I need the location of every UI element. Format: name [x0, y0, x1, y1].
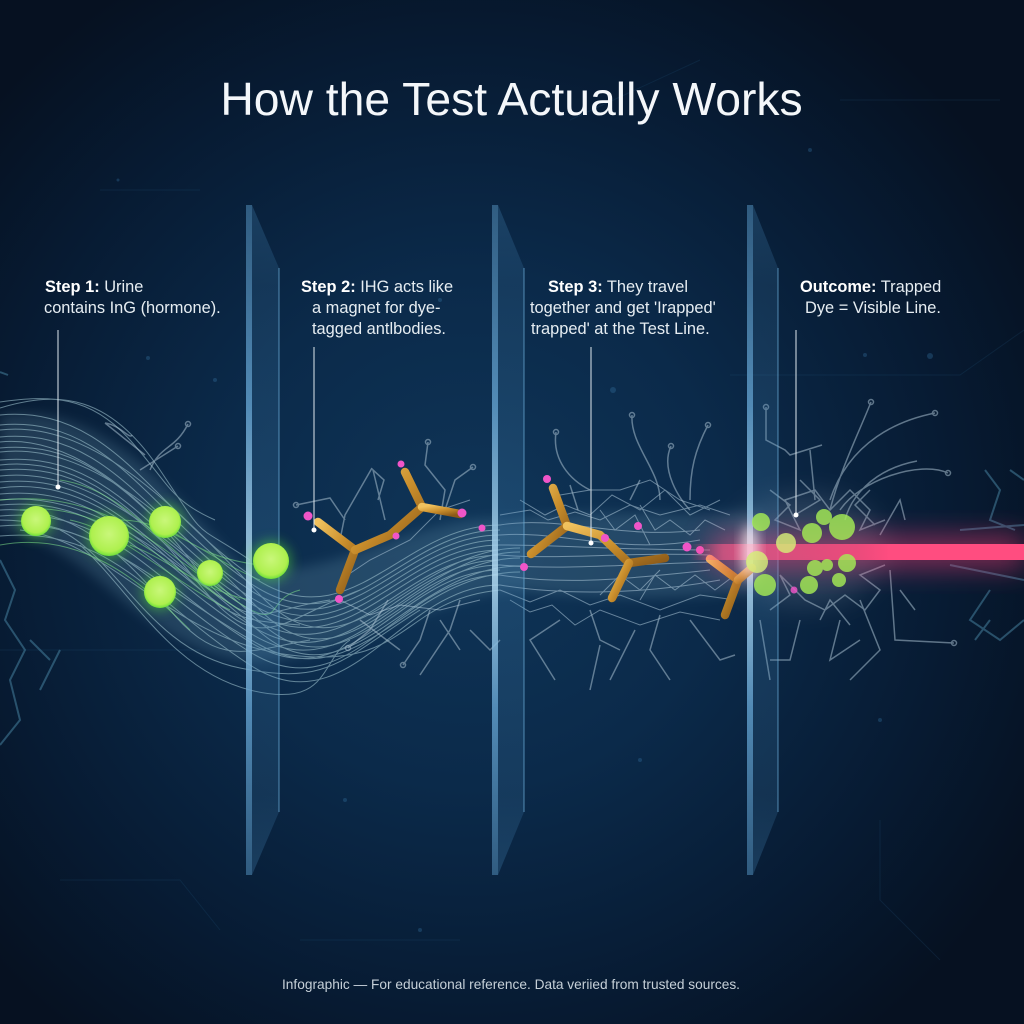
panel 3 [747, 205, 778, 875]
step 2 caption: IHG acts like [356, 278, 453, 296]
outcome caption: Dye = Visible Line. [805, 299, 941, 317]
step 3 caption: Step 3: [548, 278, 603, 296]
leader line 4 [794, 330, 798, 518]
trapped green spheres [746, 509, 856, 596]
step 1 caption: contains InG (hormone). [44, 299, 221, 317]
panel 1 [246, 205, 279, 875]
step 2 caption: tagged antlbodies. [312, 320, 446, 338]
leader line 2 [312, 347, 316, 532]
fluid strand band [0, 399, 760, 695]
panel 2 [492, 205, 524, 875]
step 2 caption: Step 2: [301, 278, 356, 296]
title: How the Test Actually Works [220, 73, 803, 125]
antibody 3 [710, 559, 752, 615]
step 1 caption: Urine [100, 278, 143, 296]
leader line 1 [56, 330, 60, 490]
red test line beam [690, 524, 1024, 580]
leader line 3 [588, 347, 594, 546]
antibody 2 [520, 475, 704, 598]
tendrils [105, 400, 956, 690]
step 1 caption: Step 1: [45, 278, 100, 296]
antibody 1 [304, 460, 486, 603]
green hCG spheres [19, 504, 291, 610]
step 2 caption: a magnet for dye- [312, 299, 440, 317]
outcome caption: Trapped [876, 278, 941, 296]
step 3 caption: together and get 'Irapped' [530, 299, 716, 317]
step 3 caption: trapped' at the Test Line. [531, 320, 710, 338]
footer note: Infographic — For educational reference. Data veriied from trusted sources. [282, 977, 740, 992]
step 3 caption: They travel [603, 278, 688, 296]
hub glow [725, 495, 885, 605]
outcome caption: Outcome: [800, 278, 876, 296]
